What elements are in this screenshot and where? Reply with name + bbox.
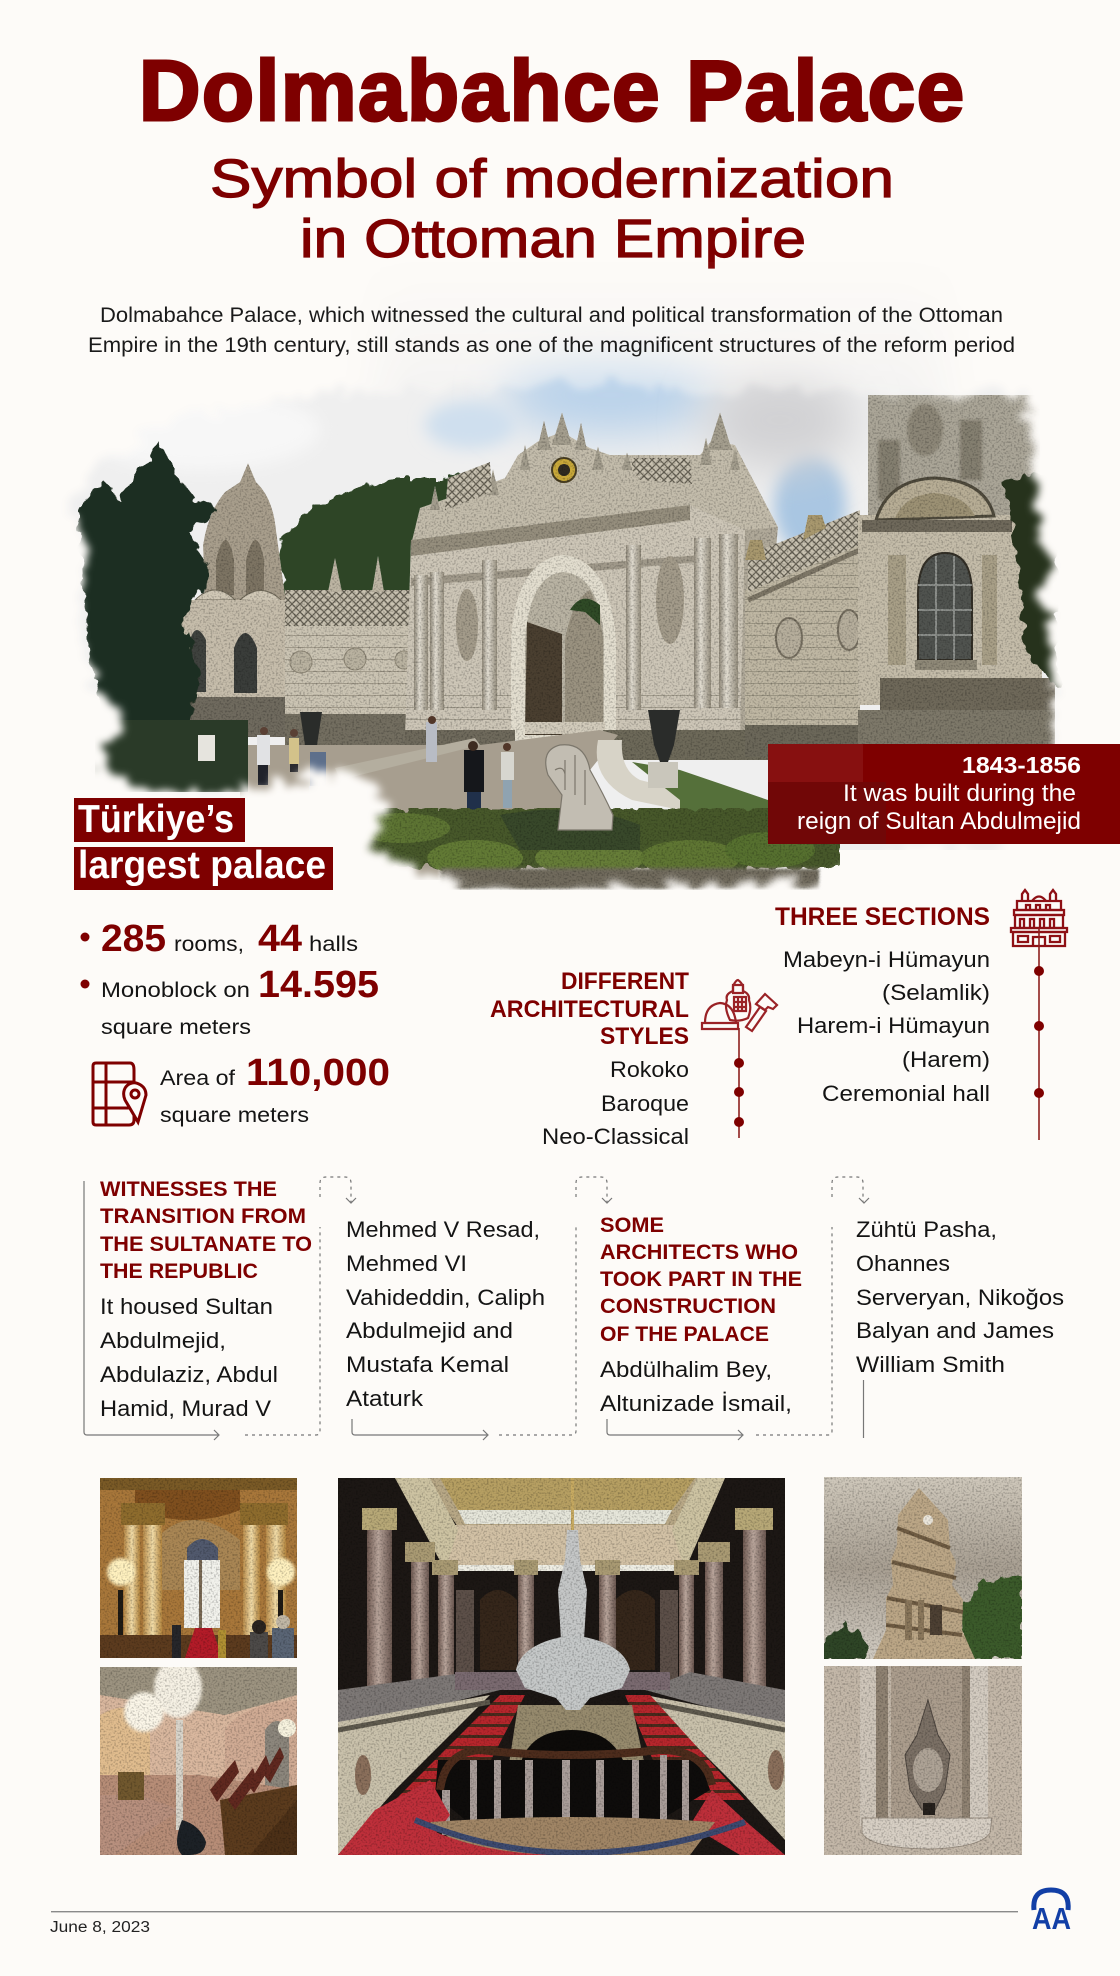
key figures: square meters <box>101 1015 251 1039</box>
lawn <box>632 762 768 812</box>
left urn <box>300 712 322 745</box>
left tower and wing <box>172 463 420 750</box>
gravel forecourt <box>240 730 770 880</box>
central gate <box>405 412 778 760</box>
key figures: rooms, <box>174 932 244 956</box>
visitors <box>257 716 514 810</box>
column 2: rulers continued <box>346 1217 545 1411</box>
photo: crystal staircase <box>338 1478 785 1855</box>
column 2: rulers continued: Mehmed V Resad, <box>346 1217 540 1242</box>
panel: architectural styles: ARCHITECTURAL <box>490 996 689 1023</box>
icon: map with pin <box>93 1063 146 1125</box>
column 4: architects continued: Zühtü Pasha, <box>856 1217 997 1242</box>
column 2: rulers continued: Vahideddin, Caliph <box>346 1285 545 1310</box>
curved low wall <box>597 740 680 810</box>
garden hedges <box>354 808 840 890</box>
panel: architectural styles: Rokoko <box>610 1057 689 1082</box>
column 1: transition: THE REPUBLIC <box>100 1259 258 1283</box>
panel: three sections: (Selamlik) <box>882 980 990 1005</box>
headline tag: Türkiye's largest palace: Türkiye’s <box>78 798 234 841</box>
icon: AA logo <box>1032 1890 1071 1936</box>
right wing <box>745 510 885 757</box>
column 4: architects continued: Serveryan, Nikoğos <box>856 1285 1064 1310</box>
subtitle: in Ottoman Empire <box>300 209 806 269</box>
column 4: architects continued <box>856 1217 1064 1377</box>
column 3: architects <box>600 1213 802 1416</box>
panel: three sections <box>775 890 1067 1140</box>
column 3: architects: ARCHITECTS WHO <box>600 1240 798 1264</box>
column 1: transition: Abdulmejid, <box>100 1328 226 1353</box>
column 1: transition: THE SULTANATE TO <box>100 1232 312 1256</box>
right urn <box>648 710 680 762</box>
key figures: 285 <box>101 918 166 960</box>
panel: architectural styles: STYLES <box>600 1023 689 1050</box>
column 1: transition: TRANSITION FROM <box>100 1204 306 1228</box>
icon: AA logo: AA <box>1032 1901 1071 1936</box>
column 2: rulers continued: Mustafa Kemal <box>346 1352 509 1377</box>
right tower <box>858 395 1055 744</box>
column 3: architects: OF THE PALACE <box>600 1322 769 1346</box>
icon: helmet, building and hammer <box>702 980 777 1031</box>
lion statue <box>546 745 613 830</box>
background tree <box>279 472 460 596</box>
column 2: rulers continued: Mehmed VI <box>346 1251 467 1276</box>
intro text: Dolmabahce Palace, which witnessed the cultural and political transformation of the Ottoman <box>100 303 1003 327</box>
key figures: 14.595 <box>258 964 379 1006</box>
column 2: rulers continued: Abdulmejid and <box>346 1318 513 1343</box>
date banner: reign of Sultan Abdulmejid <box>797 808 1081 835</box>
panel: three sections: THREE SECTIONS <box>775 903 990 931</box>
headline tag: Türkiye's largest palace: largest palace <box>78 844 326 887</box>
key figures: Area of <box>160 1066 235 1090</box>
column 3: architects: Abdülhalim Bey, <box>600 1357 772 1382</box>
panel: three sections: Ceremonial hall <box>822 1081 990 1106</box>
date banner: 1843-1856 <box>962 752 1081 778</box>
sky <box>40 250 1080 850</box>
column 1: transition <box>100 1177 312 1421</box>
panel: architectural styles: Baroque <box>601 1091 689 1116</box>
key figures: 110,000 <box>246 1052 390 1094</box>
connector arrows between columns <box>84 1177 869 1440</box>
photo: marble fountain <box>824 1666 1022 1855</box>
key figures: Monoblock on <box>101 978 250 1002</box>
column 2: rulers continued: Ataturk <box>346 1386 424 1411</box>
column 3: architects: CONSTRUCTION <box>600 1294 776 1318</box>
panel: architectural styles <box>490 968 777 1149</box>
headline tag: Türkiye's largest palace <box>74 798 333 890</box>
column 1: transition: WITNESSES THE <box>100 1177 277 1201</box>
column 3: architects: Altunizade İsmail, <box>600 1391 792 1416</box>
hedge wall with sign <box>95 720 248 792</box>
icon: palace <box>1011 890 1067 946</box>
key figures: square meters <box>160 1103 309 1127</box>
column 4: architects continued: William Smith <box>856 1352 1005 1377</box>
column 4: architects continued: Ohannes <box>856 1251 950 1276</box>
intro text: Empire in the 19th century, still stands as one of the magnificent structures of the reform period <box>88 333 1015 357</box>
intro text <box>88 303 1015 357</box>
right edge foliage <box>1005 470 1058 690</box>
photo: golden hall <box>100 1478 297 1658</box>
date banner: It was built during the <box>843 780 1076 807</box>
column 4: architects continued: Balyan and James <box>856 1318 1054 1343</box>
footer rule and date: June 8, 2023 <box>50 1919 150 1936</box>
panel: three sections: Harem-i Hümayun <box>797 1013 990 1038</box>
column 3: architects: SOME <box>600 1213 664 1237</box>
panel: architectural styles: DIFFERENT <box>561 968 689 995</box>
hero photo: palace gate with brushed edges <box>40 250 1080 890</box>
photo: clock tower <box>824 1477 1022 1660</box>
timeline: sections <box>1034 928 1044 1140</box>
column 3: architects: TOOK PART IN THE <box>600 1267 802 1291</box>
key figures: halls <box>309 932 358 956</box>
key figures: 44 <box>258 918 302 960</box>
date banner <box>768 744 1120 844</box>
subtitle <box>210 149 894 269</box>
column 1: transition: Hamid, Murad V <box>100 1396 271 1421</box>
left cedar tree <box>78 440 218 740</box>
title: Dolmabahce Palace <box>139 44 964 139</box>
stair wall <box>335 738 480 776</box>
column 1: transition: Abdulaziz, Abdul <box>100 1362 278 1387</box>
column 1: transition: It housed Sultan <box>100 1294 273 1319</box>
key figures <box>80 918 390 1127</box>
palace stonework with texture <box>172 395 1055 795</box>
panel: architectural styles: Neo-Classical <box>542 1124 689 1149</box>
subtitle: Symbol of modernization <box>210 149 894 209</box>
panel: three sections: Mabeyn-i Hümayun <box>783 947 990 972</box>
photo: dining hall <box>100 1658 297 1855</box>
timeline: styles <box>734 1028 744 1138</box>
panel: three sections: (Harem) <box>902 1047 990 1072</box>
